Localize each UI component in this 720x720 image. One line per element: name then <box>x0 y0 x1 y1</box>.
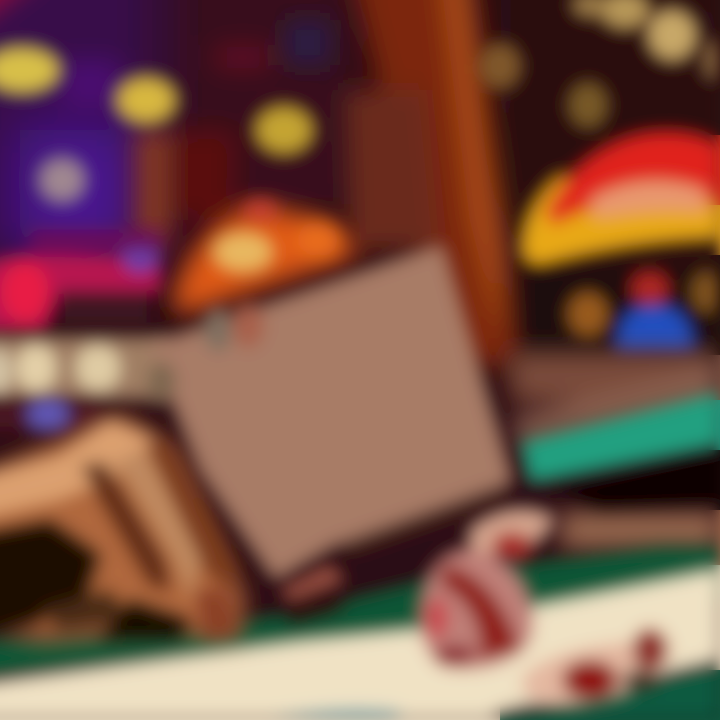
background: wall highlights <box>0 0 330 250</box>
card corner mark <box>148 304 264 402</box>
table edge: right side band <box>510 352 720 548</box>
hand: fingers holding the card <box>0 415 245 640</box>
glow: flame arch behind the card <box>172 208 358 315</box>
glow: flame highlights <box>213 200 340 272</box>
band: teal strip on the right <box>522 392 720 482</box>
arch: rainbow sign on the right <box>522 132 720 268</box>
table: green felt <box>0 545 720 720</box>
background: purple wall on the left <box>0 0 720 380</box>
hand: finger highlights and gaps <box>0 420 240 640</box>
lights: dim bulbs on the upper right <box>479 0 720 128</box>
pillar: orange wooden column <box>345 0 520 365</box>
sign: pink neon on the left <box>0 230 160 330</box>
lights: white bulb row on the left <box>0 338 170 398</box>
table: shadow between hand and chips <box>280 565 345 625</box>
band: black strip on the right <box>555 452 720 510</box>
lights: gold bulbs on the left <box>0 47 313 202</box>
playing card <box>148 245 512 580</box>
lights: orange and blue ornaments on the lower right <box>525 270 720 355</box>
lights: blue bulb under the row <box>0 398 100 430</box>
table: white betting area <box>0 568 720 720</box>
chips: scattered chips on the right <box>522 630 670 705</box>
chips: red poker chip stack <box>420 510 555 669</box>
